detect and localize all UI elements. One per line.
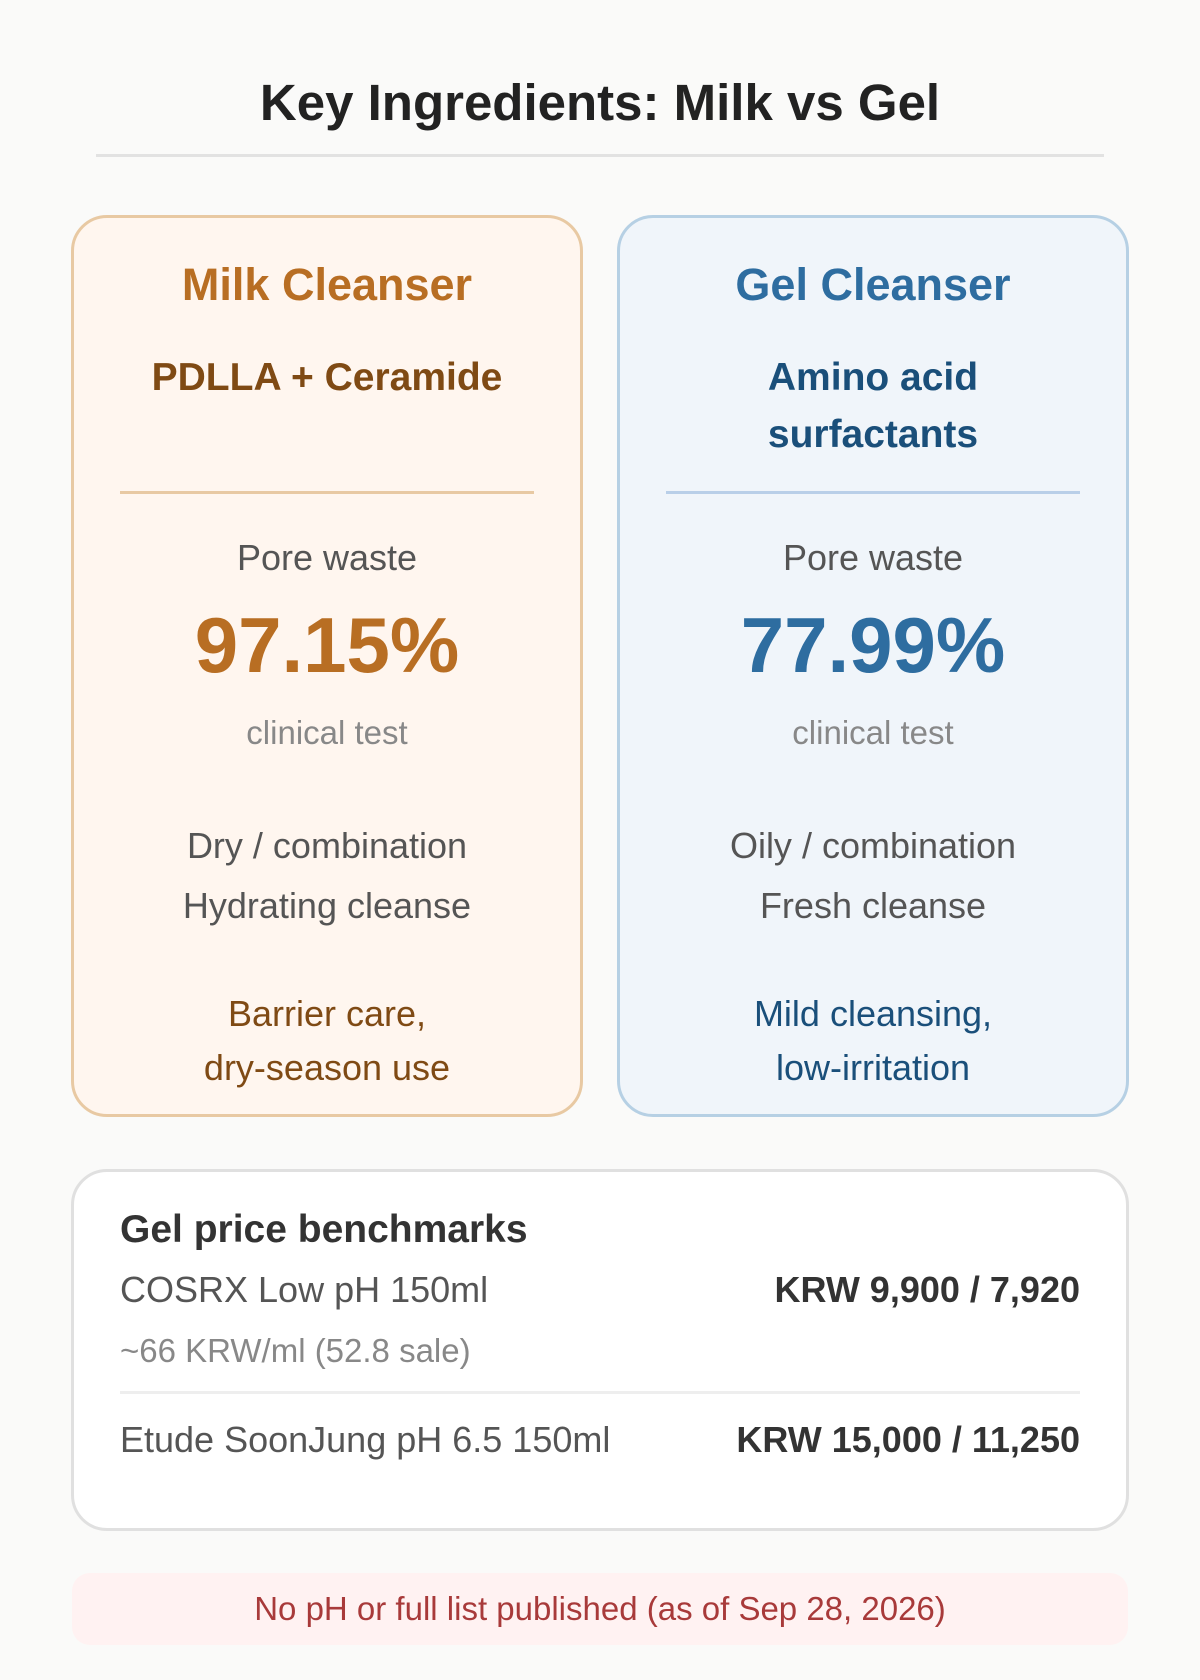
milk divider xyxy=(120,491,534,494)
gel metric value: 77.99% xyxy=(741,601,1005,689)
gel skin type and feel: Fresh cleanse xyxy=(760,885,986,926)
milk skin type and feel: Hydrating cleanse xyxy=(183,885,471,926)
milk benefit note: Barrier care, xyxy=(228,993,426,1034)
title: Key Ingredients: Milk vs Gel xyxy=(260,74,940,131)
gel metric label: Pore waste xyxy=(783,537,963,578)
gel benefit note: Mild cleansing, xyxy=(754,993,992,1034)
Etude product name: Etude SoonJung pH 6.5 150ml xyxy=(120,1419,610,1460)
gel benefit note xyxy=(754,993,992,1088)
panel: gel cleanser xyxy=(617,215,1129,1117)
price heading: Gel price benchmarks xyxy=(120,1208,528,1251)
gel skin type and feel: Oily / combination xyxy=(730,825,1016,866)
gel heading: Gel Cleanser xyxy=(735,259,1011,310)
Etude price: KRW 15,000 / 11,250 xyxy=(736,1419,1080,1460)
milk metric value: 97.15% xyxy=(195,601,459,689)
milk key ingredient: PDLLA + Ceramide xyxy=(152,356,502,399)
gel key ingredient: surfactants xyxy=(768,413,978,456)
panel: gel price benchmarks xyxy=(71,1169,1129,1531)
milk skin type and feel xyxy=(183,825,471,926)
milk benefit note: dry-season use xyxy=(204,1047,450,1088)
callout: disclosure banner xyxy=(72,1573,1128,1645)
milk metric label: Pore waste xyxy=(237,537,417,578)
panel: milk cleanser xyxy=(71,215,583,1117)
COSRX price: KRW 9,900 / 7,920 xyxy=(774,1269,1080,1310)
gel divider xyxy=(666,491,1080,494)
gel metric note: clinical test xyxy=(792,714,954,751)
milk heading: Milk Cleanser xyxy=(182,259,472,310)
gel skin type and feel xyxy=(730,825,1016,926)
milk metric note: clinical test xyxy=(246,714,408,751)
title divider xyxy=(96,154,1104,157)
milk benefit note xyxy=(204,993,450,1088)
row divider xyxy=(120,1391,1080,1394)
gel key ingredient: Amino acid xyxy=(768,356,978,399)
gel benefit note: low-irritation xyxy=(776,1047,970,1088)
callout: disclosure banner: No pH or full list published (as of Sep 28, 2026) xyxy=(254,1590,946,1627)
COSRX product name: COSRX Low pH 150ml xyxy=(120,1269,488,1310)
gel key ingredient xyxy=(768,356,978,456)
milk skin type and feel: Dry / combination xyxy=(187,825,467,866)
COSRX unit price: ~66 KRW/ml (52.8 sale) xyxy=(120,1332,471,1369)
